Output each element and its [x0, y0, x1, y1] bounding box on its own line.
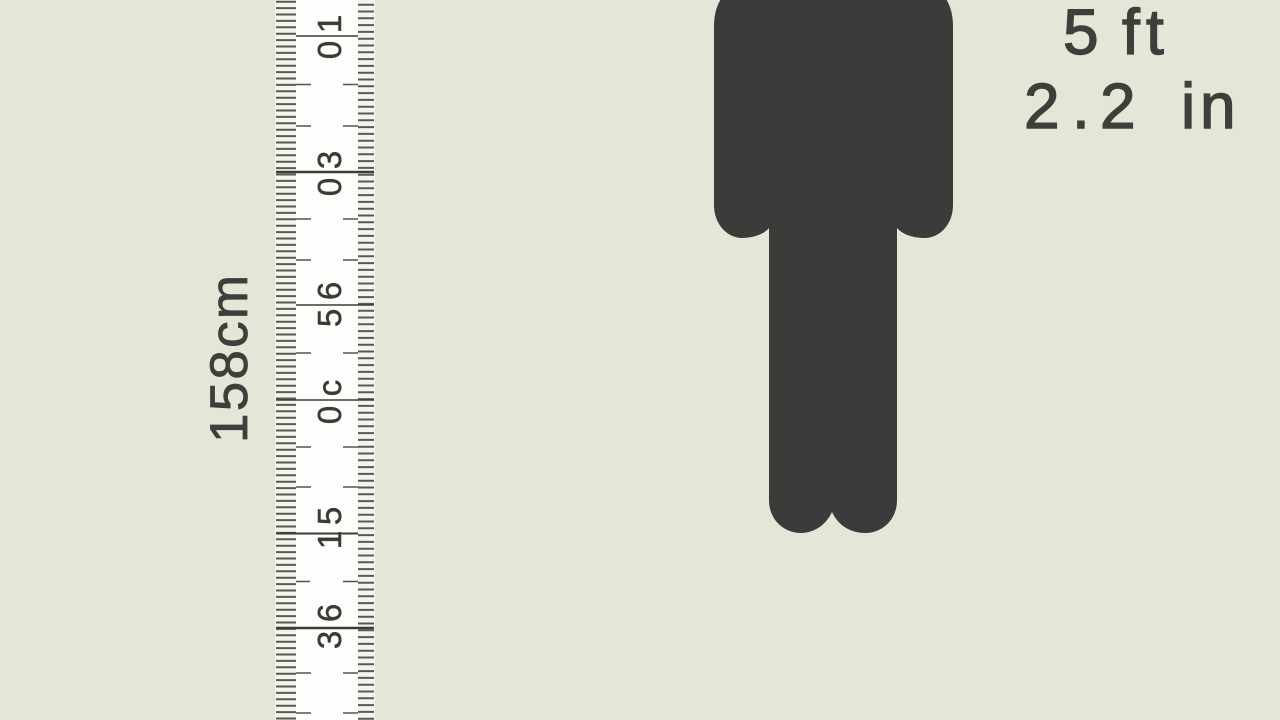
tape numerals: 6	[311, 282, 348, 300]
tape minor lines	[296, 84, 358, 713]
tape numerals: 5	[311, 309, 348, 327]
tape numerals: 1	[311, 15, 348, 33]
tape numerals	[311, 15, 348, 649]
tape numerals: c	[311, 380, 348, 396]
inches value: 2.2 in	[1024, 70, 1236, 142]
height in feet and inches	[1024, 0, 1236, 142]
tape numerals: 6	[311, 604, 348, 622]
tape body	[275, 0, 375, 720]
tape numerals: 0	[311, 406, 348, 424]
tape numerals: 3	[311, 151, 348, 169]
height label: 158cm: 158cm	[200, 275, 259, 443]
tape numerals: 3	[311, 631, 348, 649]
tape numerals: 0	[311, 41, 348, 59]
measuring tape	[275, 0, 375, 720]
tape major lines	[276, 36, 374, 628]
tape numerals: 5	[311, 507, 348, 525]
tape numerals: 0	[311, 178, 348, 196]
tape edge tick marks	[286, 0, 366, 720]
human silhouette figure	[714, 0, 953, 533]
tape numerals: 1	[311, 531, 348, 549]
